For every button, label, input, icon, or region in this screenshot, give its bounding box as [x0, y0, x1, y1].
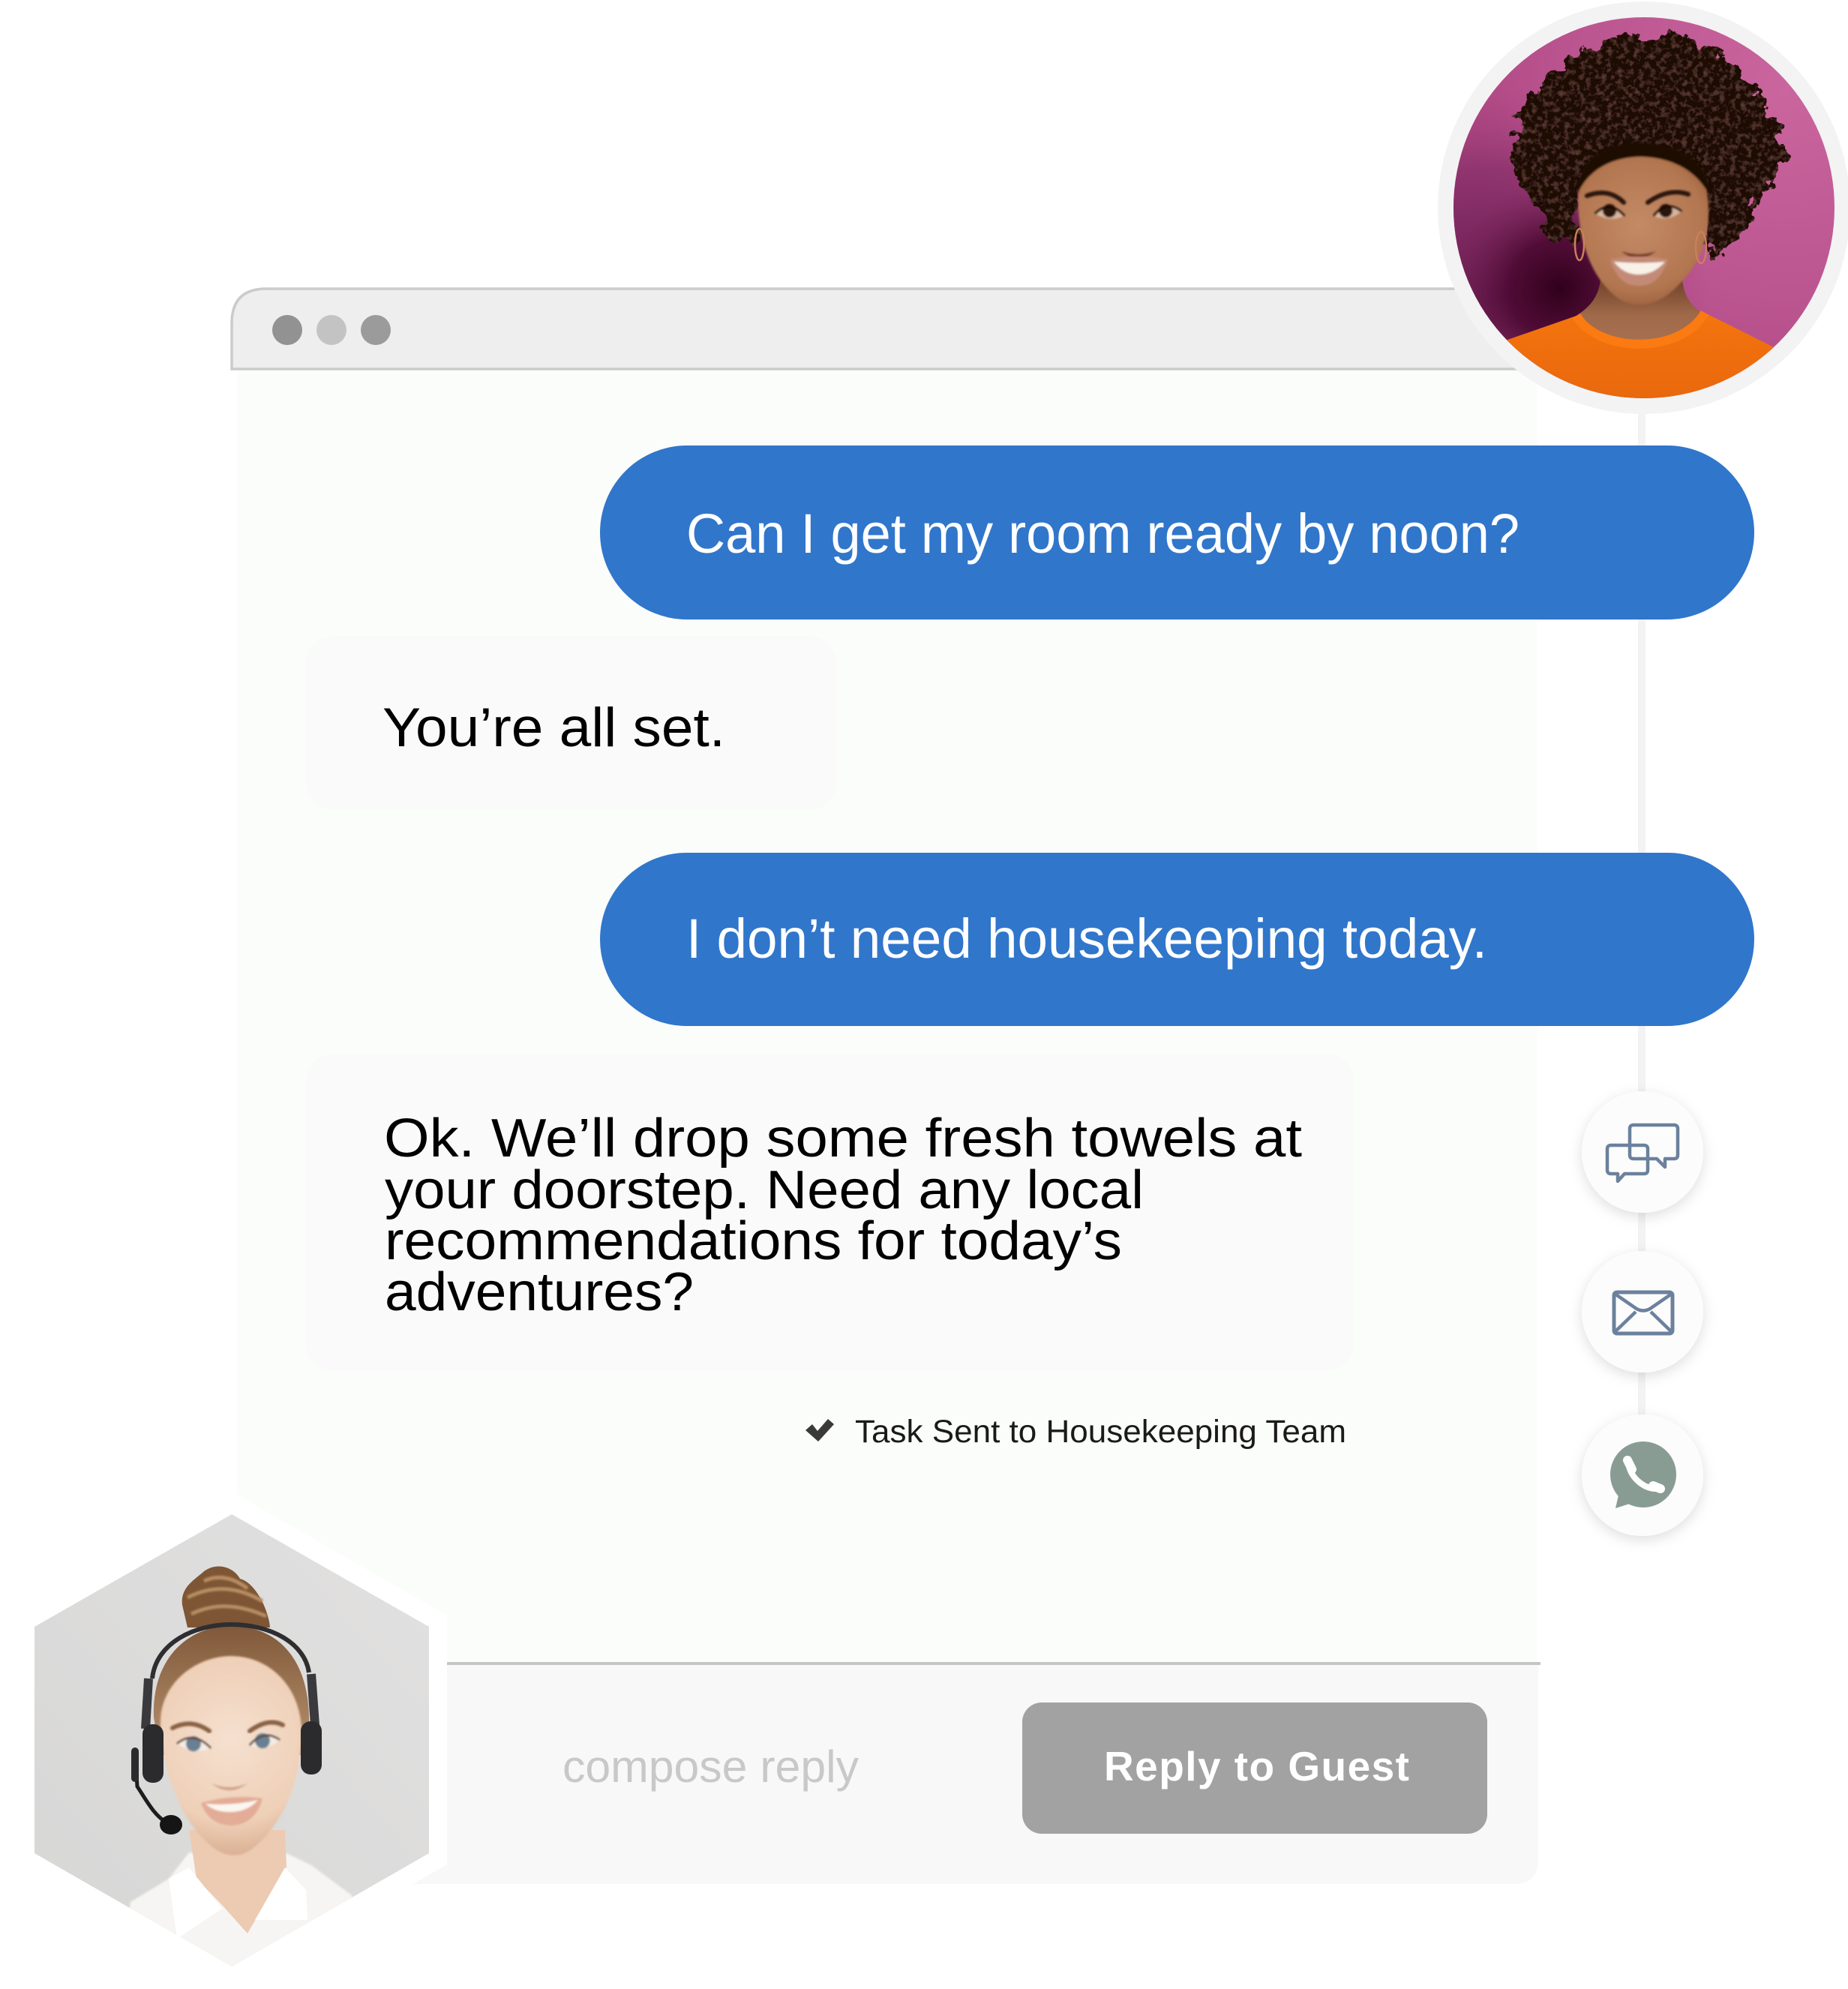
icon: check mark [806, 1419, 834, 1442]
shirt [1508, 313, 1774, 398]
agent portrait [34, 1514, 447, 1966]
guest message: housekeeping [600, 853, 1754, 1026]
hexagon frame [16, 1492, 447, 1988]
guest portrait [1438, 2, 1848, 420]
smile [1610, 256, 1668, 286]
neck [189, 1830, 286, 1934]
channel connector line [1638, 405, 1646, 1440]
shirt [129, 1852, 352, 1966]
icon: whatsapp channel [1582, 1414, 1703, 1536]
reply button: Reply to Guest [1104, 1743, 1409, 1790]
reply footer [375, 1664, 1538, 1884]
portrait ring [1438, 2, 1848, 414]
guest message: room ready [600, 446, 1754, 620]
guest photo [1448, 11, 1841, 420]
face [160, 1656, 302, 1856]
guest message: room ready: Can I get my room ready by noon? [686, 502, 1520, 565]
staff reply: all set: You’re all set. [382, 698, 725, 758]
agent photo [30, 1508, 435, 1980]
smile [201, 1797, 262, 1826]
staff reply: fresh towels: adventures? [385, 1262, 694, 1322]
staff reply: fresh towels: your doorstep. Need any local [385, 1160, 1144, 1220]
earrings [1575, 229, 1706, 263]
icon: email channel [1582, 1251, 1703, 1372]
eyes [177, 1733, 280, 1751]
nose shadow [212, 1784, 248, 1790]
neck [1576, 279, 1700, 340]
guest message: housekeeping: I don’t need housekeeping today. [686, 908, 1487, 970]
window control dots [272, 315, 391, 345]
chat window [232, 289, 1545, 1884]
face [1576, 142, 1710, 304]
eyes [1595, 204, 1682, 219]
hair [1511, 33, 1789, 259]
ear cups and mic [131, 1721, 322, 1834]
staff reply: fresh towels: Ok. We’ll drop some fresh towels at [384, 1108, 1302, 1168]
compose reply placeholder: compose reply [562, 1742, 859, 1792]
staff reply: all set [306, 636, 836, 810]
hair bun [182, 1566, 270, 1628]
icon: sms chat channel [1582, 1091, 1703, 1213]
shirt collar shading [169, 1868, 308, 1939]
eyebrows [1587, 192, 1688, 202]
eyebrows [172, 1722, 283, 1731]
staff reply: fresh towels [306, 1054, 1354, 1371]
window title bar [232, 289, 1545, 369]
staff reply: fresh towels: recommendations for today’s [385, 1211, 1122, 1271]
chat window body [237, 370, 1538, 1664]
hair [154, 1626, 309, 1755]
nose shadow [1622, 251, 1656, 258]
reply button [1022, 1702, 1487, 1834]
headset [135, 1624, 315, 1822]
footer divider [442, 1662, 1540, 1665]
task status: Task Sent to Housekeeping Team [855, 1414, 1346, 1450]
